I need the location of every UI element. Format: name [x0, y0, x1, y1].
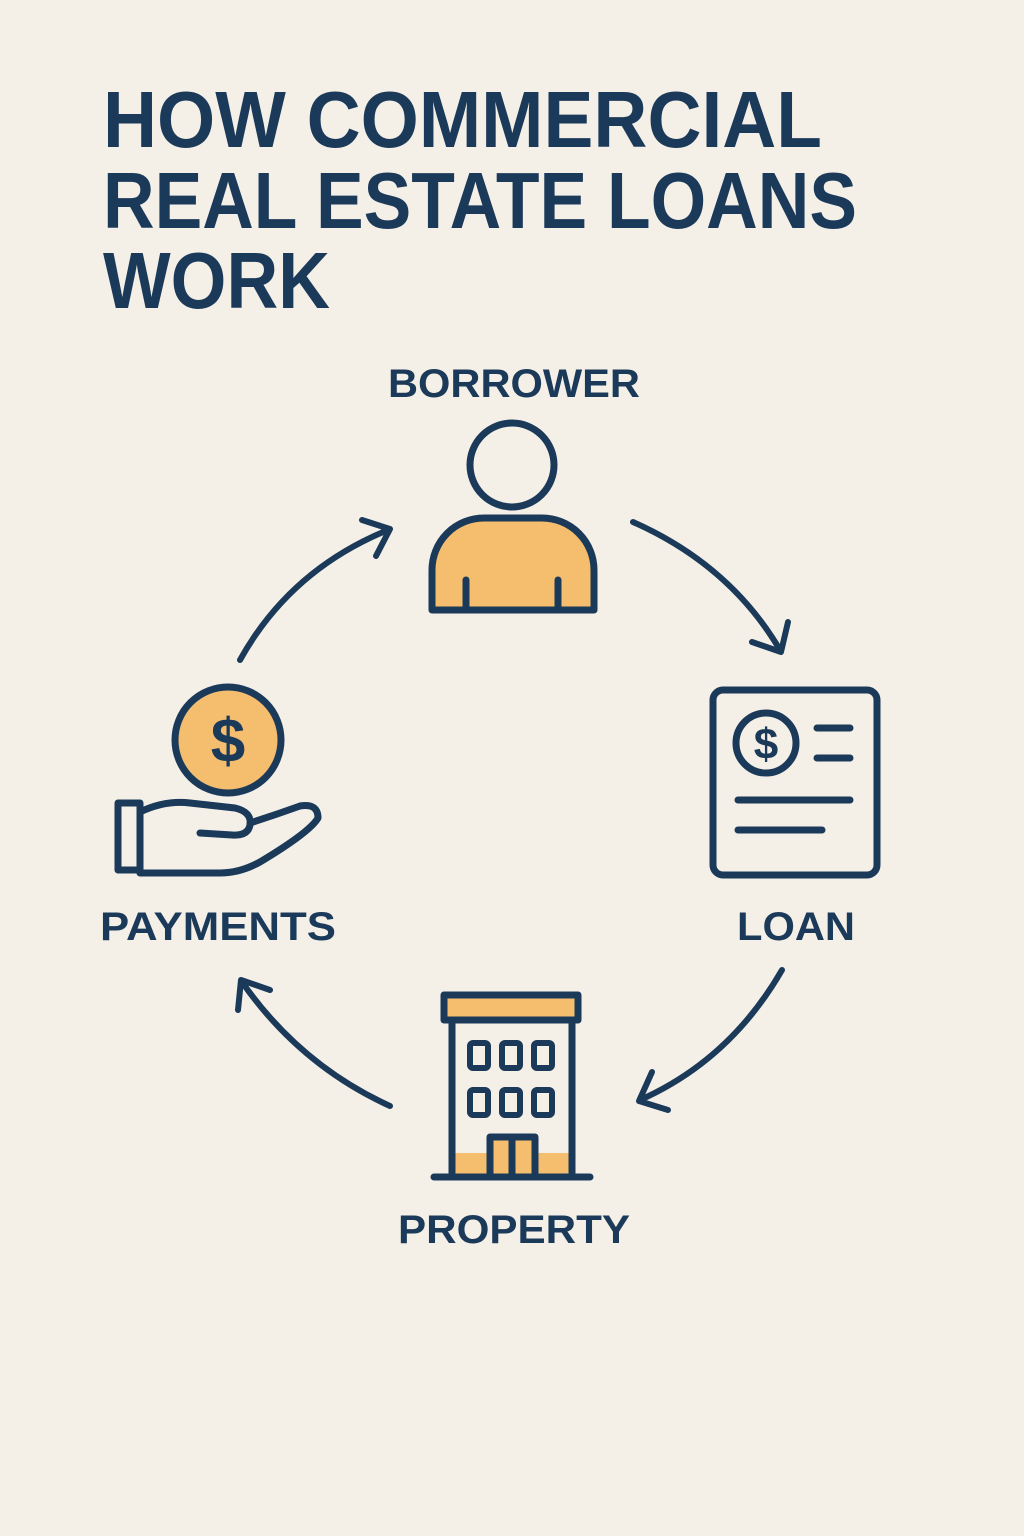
arrow: property to payments — [238, 980, 390, 1106]
label: borrower: BORROWER — [388, 362, 640, 406]
arrow: borrower to loan — [633, 522, 788, 652]
icon: payments hand with coin: $ — [211, 707, 245, 776]
title: REAL ESTATE LOANS — [103, 156, 857, 245]
label: property: PROPERTY — [398, 1208, 630, 1252]
icon: property building — [434, 995, 590, 1177]
icon: payments hand with coin — [118, 687, 318, 873]
label: loan: LOAN — [737, 905, 855, 949]
title: HOW COMMERCIAL — [103, 75, 822, 164]
title — [103, 75, 857, 325]
title: WORK — [103, 236, 330, 325]
icon: borrower person — [432, 423, 594, 610]
icon: loan document — [713, 690, 877, 875]
arrow: loan to property — [639, 970, 782, 1110]
arrow: payments to borrower — [240, 520, 390, 660]
icon: loan document: $ — [754, 720, 778, 769]
label: payments: PAYMENTS — [100, 905, 336, 949]
